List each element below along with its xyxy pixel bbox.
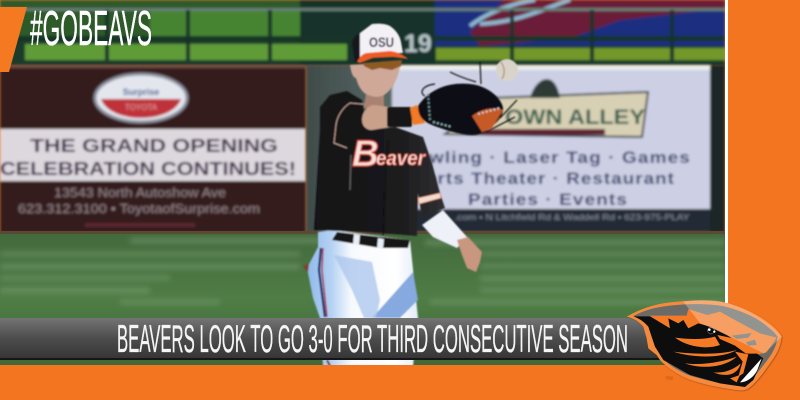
jersey torso — [314, 91, 445, 236]
white frame strip — [725, 0, 728, 365]
logo highlight — [683, 300, 782, 354]
orange bottom panel — [0, 365, 800, 400]
jersey script: B — [352, 133, 379, 174]
logo gray snout marks — [732, 333, 757, 346]
headline bar — [0, 318, 660, 361]
left wall advert: grand opening: 13543 North Autoshow Ave — [54, 185, 226, 200]
logo trademark: TM — [665, 375, 672, 381]
jersey sleeve — [334, 103, 373, 148]
right wall advert: bowling alley: orts Theater · Restaurant — [425, 169, 675, 188]
logo orange stripes — [673, 335, 757, 382]
stands and fence — [0, 0, 725, 66]
right wall advert: bowling alley: wling · Laser Tag · Games — [428, 148, 691, 167]
cap: OSU — [369, 34, 394, 50]
left wall advert: grand opening — [0, 65, 306, 233]
logo orange fur — [649, 309, 777, 354]
left wall advert: grand opening: THE GRAND OPENING — [30, 135, 278, 156]
left wall advert: grand opening: TOYOTA — [125, 103, 158, 112]
right wall advert: bowling alley: Parties · Events — [468, 190, 628, 209]
left wall advert: grand opening: 623.312.3100 • ToyotaofSurprise.com — [18, 201, 260, 216]
left wall advert: grand opening: CELEBRATION CONTINUES! — [0, 158, 296, 179]
right wall advert: bowling alley: .com • N Litchfield Rd & Waddell Rd • 623-975-PLAY — [454, 213, 690, 222]
grass field — [0, 231, 725, 365]
jersey script — [352, 133, 426, 174]
logo eye — [708, 327, 715, 334]
logo gray crown — [633, 304, 778, 387]
forearm — [362, 105, 390, 130]
white undersleeve and hand — [422, 210, 467, 248]
orange side panel — [728, 0, 800, 400]
player — [303, 24, 518, 366]
logo: beaver — [627, 300, 782, 390]
cap — [352, 24, 408, 63]
glove — [418, 84, 503, 135]
belt — [332, 232, 410, 248]
infographic graphic: #GOBEAVS — [30, 2, 152, 56]
logo tooth — [740, 358, 762, 382]
right wall advert: bowling alley: OWN ALLEY — [505, 106, 645, 129]
logo black head — [633, 316, 763, 387]
left wall advert: grand opening: Surprise — [123, 87, 159, 97]
right wall advert: bowling alley — [306, 65, 725, 233]
neck and face — [350, 62, 401, 110]
hashtag corner accent — [0, 7, 27, 72]
sunglasses — [363, 60, 402, 70]
pants — [307, 230, 418, 366]
stands and fence: 19 — [404, 30, 432, 58]
baseball — [496, 59, 518, 81]
jersey script: eaver — [376, 148, 426, 170]
